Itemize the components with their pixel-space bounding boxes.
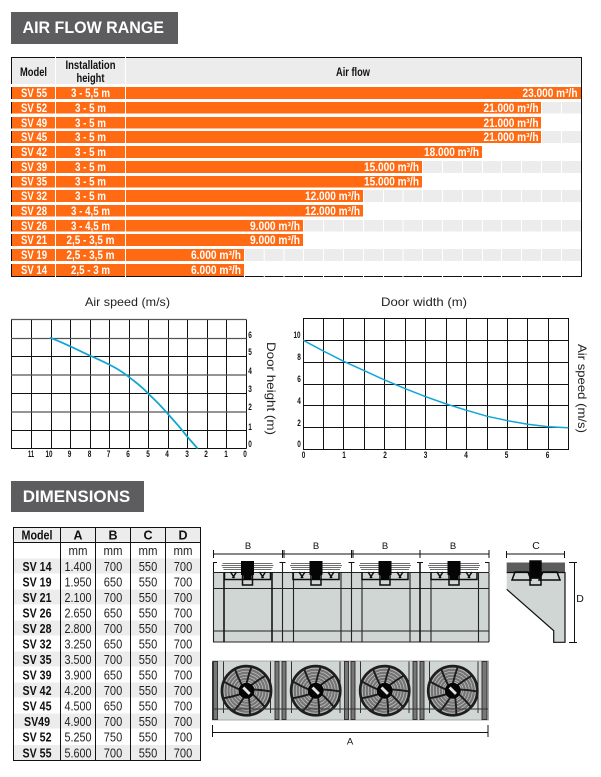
row SV 19: 6.000 m³/h [191, 250, 241, 262]
dimension rows: SV 35 [22, 653, 52, 667]
row SV 42: 3 - 5 m [75, 147, 106, 159]
heading: dimensions [11, 481, 144, 512]
dimension rows: 650 [104, 576, 122, 590]
dimension rows: 700 [104, 622, 122, 636]
x axis labels: 5 [146, 449, 150, 459]
x axis labels: 8 [88, 449, 91, 459]
dimension rows: 550 [139, 560, 157, 574]
dimension rows: 4.900 [64, 715, 92, 729]
column headers: mm [138, 544, 158, 558]
row SV 42 [11, 146, 482, 159]
fan plates [212, 662, 478, 720]
row SV 39: SV 39 [21, 162, 47, 174]
column headers: C [143, 528, 153, 542]
panel frame lines [213, 562, 489, 642]
dimension rows: 650 [104, 700, 122, 714]
dimension line A: A [347, 736, 354, 748]
row SV 42: 18.000 m³/h [424, 147, 479, 159]
dimension rows: 2.800 [64, 622, 92, 636]
x axis labels: 7 [107, 449, 110, 459]
dimension rows: 3.900 [64, 668, 92, 682]
dimension line D: D [576, 593, 584, 605]
row SV 49: 3 - 5 m [75, 118, 106, 130]
y axis labels: 4 [297, 396, 301, 406]
dimension line B: B [382, 541, 388, 552]
row SV 32 [11, 190, 363, 203]
dimension rows: 2.100 [64, 591, 92, 605]
heading: air flow range [11, 12, 178, 44]
dimension line B: B [313, 541, 319, 552]
fan 1 [222, 666, 271, 715]
row SV 35: 3 - 5 m [75, 176, 106, 188]
table header row: Installation [66, 60, 116, 72]
dimension rows: 700 [174, 715, 192, 729]
x axis labels: 2 [383, 450, 387, 460]
dimension rows: 550 [139, 715, 157, 729]
x axis labels: 1 [224, 449, 228, 459]
row SV 55: 3 - 5,5 m [71, 88, 110, 100]
dimension rows: SV 19 [22, 576, 52, 590]
dimension rows: SV49 [24, 715, 50, 729]
fan 4 [428, 666, 477, 715]
row SV 55 [11, 87, 581, 100]
row SV 32: 12.000 m³/h [305, 191, 360, 203]
table header row: Air flow [336, 67, 370, 79]
dimension rows: 700 [174, 684, 192, 698]
dimension rows: 4.200 [64, 684, 92, 698]
side profile [507, 562, 565, 642]
column headers [22, 528, 192, 558]
row SV 21: 9.000 m³/h [250, 235, 300, 247]
row SV 26: 3 - 4,5 m [71, 221, 110, 233]
row SV 28: 3 - 4,5 m [71, 206, 110, 218]
dimension rows: 700 [174, 668, 192, 682]
row SV 52: 21.000 m³/h [484, 103, 538, 115]
dimension rows: 550 [139, 668, 157, 682]
dimension rows: 550 [139, 591, 157, 605]
dimension rows: 700 [104, 591, 122, 605]
row SV 45 [11, 131, 541, 144]
cross rail [213, 708, 488, 710]
dimension rows: 3.500 [64, 653, 92, 667]
row SV 14: 6.000 m³/h [191, 265, 241, 277]
heading: air flow range: AIR FLOW RANGE [22, 18, 164, 37]
column headers: mm [104, 544, 122, 558]
row SV 55: 23.000 m³/h [522, 88, 578, 100]
x axis labels: 0 [302, 450, 305, 460]
y axis labels: 6 [248, 330, 252, 340]
dimension rows: 4.500 [64, 700, 92, 714]
dimension line B: B [450, 541, 456, 552]
dimension rows: 550 [139, 653, 157, 667]
dimension rows: SV 52 [22, 730, 52, 744]
dimension rows: 5.600 [64, 746, 92, 760]
corner brackets [214, 562, 489, 572]
x axis labels [302, 450, 549, 460]
fan 3 [360, 666, 409, 715]
row SV 14: 2,5 - 3 m [71, 265, 110, 277]
dimension rows: 650 [104, 668, 122, 682]
x axis labels: 6 [546, 450, 549, 460]
motor assemblies [222, 561, 480, 585]
x axis labels: 3 [424, 450, 427, 460]
dimension rows: 750 [104, 730, 122, 744]
y axis labels: 0 [297, 439, 301, 449]
dimension rows: 700 [174, 591, 192, 605]
table header row [11, 57, 582, 85]
dimension rows: 1.950 [64, 576, 92, 590]
x axis labels: 11 [28, 449, 34, 459]
row SV 26: SV 26 [21, 221, 47, 233]
column headers: Model [22, 528, 52, 542]
dimension rows: 700 [174, 560, 192, 574]
x axis labels: 1 [342, 450, 346, 460]
column headers: D [178, 528, 188, 542]
dimension rows: SV 14 [22, 560, 52, 574]
heading: dimensions: DIMENSIONS [23, 487, 130, 506]
x axis labels: 9 [68, 449, 71, 459]
x axis labels: 10 [46, 449, 52, 459]
y axis labels: 0 [248, 439, 252, 449]
row SV 49 [11, 117, 541, 130]
row SV 19 [11, 249, 244, 262]
dimension rows: 550 [139, 746, 157, 760]
dimension rows: 3.250 [64, 638, 92, 652]
row SV 45: SV 45 [21, 132, 48, 144]
dimension rows: 700 [174, 653, 192, 667]
row SV 52: SV 52 [21, 103, 47, 115]
dimension rows: 700 [104, 653, 122, 667]
x axis labels: 6 [126, 449, 130, 459]
chart title: Air speed (m/s) [85, 295, 170, 309]
row SV 21: SV 21 [21, 235, 48, 247]
row SV 28: SV 28 [21, 206, 48, 218]
row SV 49: SV 49 [21, 118, 47, 130]
table frame [11, 57, 582, 277]
unit body [214, 572, 489, 642]
row SV 39: 15.000 m³/h [364, 162, 419, 174]
x axis labels: 3 [185, 449, 189, 459]
y axis title: Door height (m) [264, 342, 278, 435]
striped row backgrounds [13, 528, 201, 760]
dividers between units [214, 662, 487, 720]
row SV 52: 3 - 5 m [75, 103, 106, 115]
dimension rows: SV 32 [22, 638, 52, 652]
diagram: front elevation with B dimensions [213, 541, 489, 642]
row SV 45: 21.000 m³/h [484, 132, 538, 144]
air speed curve [50, 338, 198, 449]
dimension rows: 700 [174, 576, 192, 590]
dimension rows: 700 [104, 684, 122, 698]
diagram: top view with fans [212, 661, 488, 748]
row SV 45: 3 - 5 m [75, 132, 106, 144]
row SV 26 [11, 220, 303, 233]
dimension rows: 700 [104, 746, 122, 760]
dimension rows: SV 21 [22, 591, 52, 605]
dimension rows: 700 [104, 715, 122, 729]
dimension rows: 1.400 [64, 560, 92, 574]
y axis title: Air speed (m/s) [575, 344, 589, 433]
dimension rows: 2.650 [64, 606, 92, 620]
dimension rows: 700 [174, 700, 192, 714]
x axis labels: 2 [204, 449, 208, 459]
chart: air speed versus door width [294, 295, 589, 460]
dimension rows: 650 [104, 638, 122, 652]
diagram: side elevation with C and D dimensions [506, 540, 584, 642]
dimension line B [214, 541, 489, 558]
y axis labels: 2 [248, 402, 252, 412]
dimension rows: 550 [139, 730, 157, 744]
y axis labels: 8 [297, 352, 301, 362]
x axis labels: 5 [505, 450, 508, 460]
y axis labels [248, 330, 252, 449]
row SV 55: SV 55 [21, 88, 48, 100]
row SV 35 [11, 176, 422, 188]
dimension rows: SV 26 [22, 606, 52, 620]
dimension rows: SV 39 [22, 668, 52, 682]
y axis labels: 6 [297, 374, 301, 384]
row SV 19: SV 19 [21, 250, 47, 262]
x axis labels: 4 [165, 449, 169, 459]
row SV 32: 3 - 5 m [75, 191, 106, 203]
y axis labels: 2 [297, 418, 301, 428]
row SV 21: 2,5 - 3,5 m [66, 235, 114, 247]
dimension rows: 700 [174, 606, 192, 620]
y axis labels [294, 330, 301, 449]
chart: door height versus air speed [11, 295, 278, 459]
dimension rows [22, 560, 192, 760]
table lines [14, 528, 200, 760]
dimensions table [13, 528, 201, 760]
row SV 52 [11, 102, 541, 115]
dimension rows: SV 42 [22, 684, 52, 698]
dimension rows: 550 [139, 622, 157, 636]
table header row: Model [20, 67, 47, 79]
row SV 28: 12.000 m³/h [305, 206, 360, 218]
row SV 32: SV 32 [21, 191, 47, 203]
column headers: mm [68, 544, 88, 558]
x axis labels: 4 [464, 450, 468, 460]
dimension rows: SV 55 [22, 746, 52, 760]
table header row: height [76, 73, 105, 85]
fan 2 [291, 666, 340, 715]
dimension rows: 700 [174, 746, 192, 760]
air flow table [11, 57, 582, 277]
x axis labels: 0 [243, 449, 247, 459]
air speed curve [303, 340, 568, 428]
dimension rows: 650 [104, 606, 122, 620]
y axis labels: 4 [248, 366, 252, 376]
top band [507, 562, 565, 572]
row SV 21 [11, 234, 303, 247]
row SV 35: SV 35 [21, 176, 48, 188]
column headers: B [108, 528, 118, 542]
motor side view [512, 561, 560, 585]
row SV 28 [11, 205, 363, 218]
dimension rows: 550 [139, 700, 157, 714]
x axis labels [28, 449, 247, 459]
y axis labels: 3 [248, 384, 252, 394]
dimension line C: C [532, 540, 540, 552]
column headers: A [73, 528, 83, 542]
row SV 39 [11, 161, 422, 174]
dimension rows: 550 [139, 684, 157, 698]
row SV 14: SV 14 [21, 265, 48, 277]
dimension rows: 550 [139, 576, 157, 590]
dimension rows: 550 [139, 606, 157, 620]
chart title: Door width (m) [381, 295, 467, 309]
dimension line A [212, 725, 488, 748]
y axis labels: 1 [248, 422, 252, 432]
row SV 19: 2,5 - 3,5 m [66, 250, 114, 262]
dimension rows: 550 [139, 638, 157, 652]
dimension rows: SV 45 [22, 700, 52, 714]
unit body [212, 661, 488, 720]
dimension rows: 700 [174, 622, 192, 636]
y axis labels: 5 [248, 347, 252, 357]
row SV 42: SV 42 [21, 147, 47, 159]
row SV 49: 21.000 m³/h [484, 118, 538, 130]
row SV 39: 3 - 5 m [75, 162, 106, 174]
y axis labels: 10 [294, 330, 300, 340]
column headers: mm [174, 544, 192, 558]
row SV 26: 9.000 m³/h [250, 221, 300, 233]
dimension rows: 700 [104, 560, 122, 574]
dimension rows: SV 28 [22, 622, 52, 636]
dimension rows: 700 [174, 730, 192, 744]
dimension rows: 5.250 [64, 730, 92, 744]
row SV 35: 15.000 m³/h [364, 176, 419, 188]
dimension rows: 700 [174, 638, 192, 652]
grey track rows [126, 102, 581, 261]
row SV 14 [11, 264, 244, 277]
dimension line B: B [245, 541, 251, 552]
